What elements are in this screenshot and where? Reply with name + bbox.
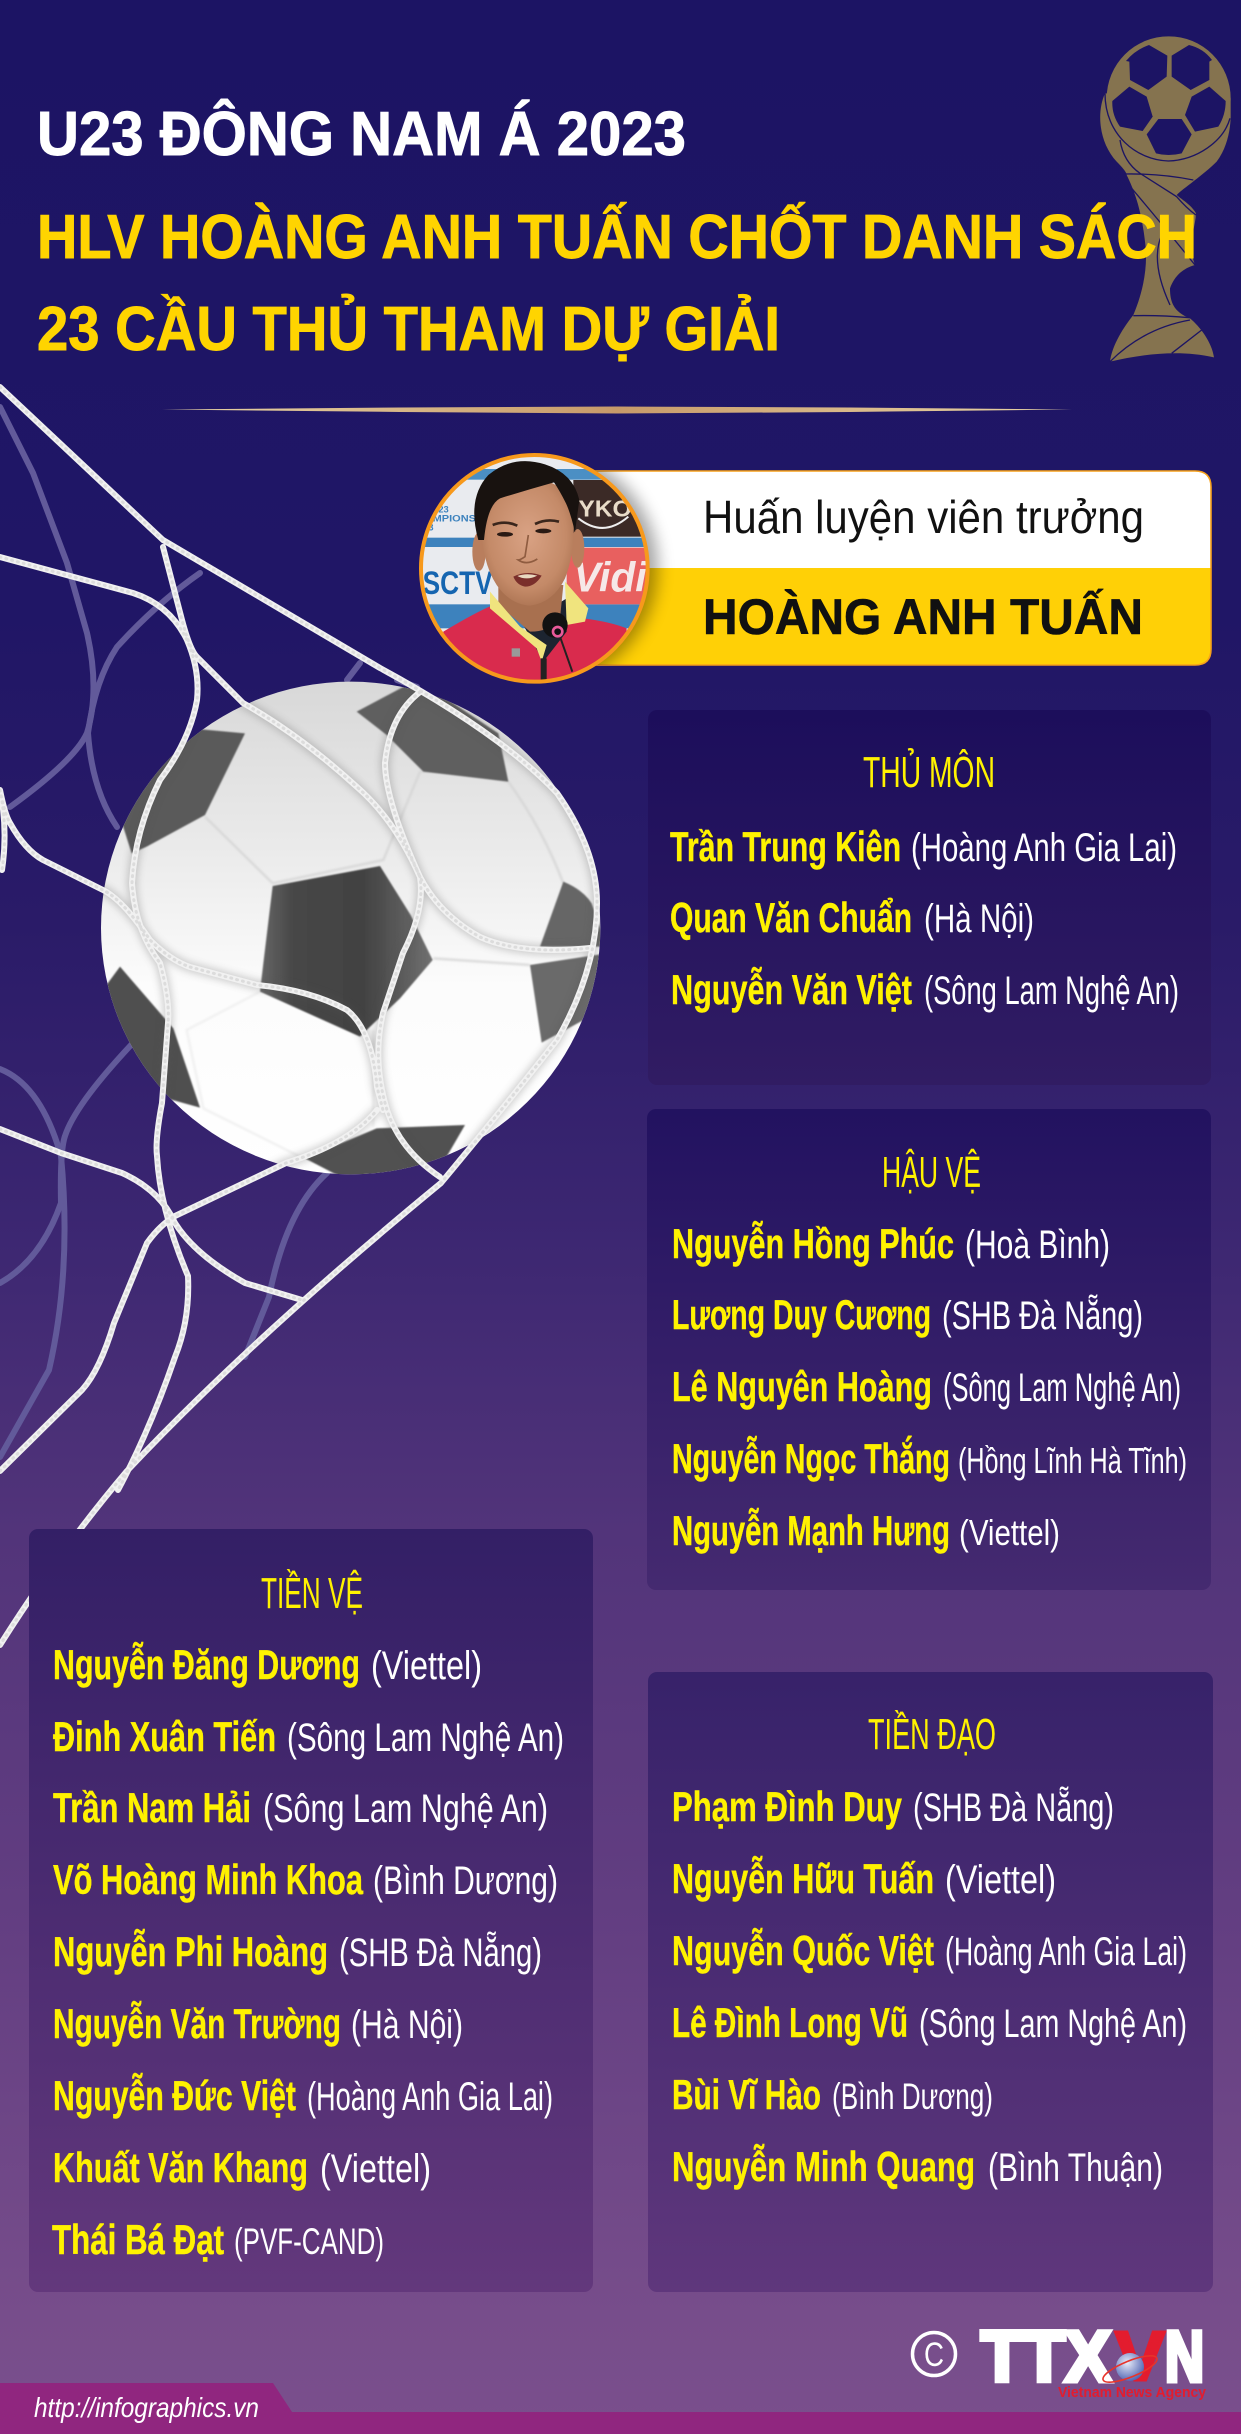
net: faint background strands xyxy=(0,407,417,1457)
player row: (Viettel) xyxy=(959,1512,1060,1553)
net: rope shadows on ball xyxy=(102,687,600,1168)
player row: Võ Hoàng Minh Khoa xyxy=(53,1856,363,1903)
footer band xyxy=(0,2383,1241,2434)
coach portrait: 3 xyxy=(428,522,434,532)
player row: (Viettel) xyxy=(945,1858,1056,1902)
player row: (Viettel) xyxy=(371,1644,482,1688)
coach card xyxy=(417,450,1211,688)
heading: midfielders: TIỀN VỆ xyxy=(261,1568,363,1618)
heading: defenders: HẬU VỆ xyxy=(882,1148,981,1197)
player row: Nguyễn Hồng Phúc xyxy=(672,1219,954,1267)
coach card: shadow and band xyxy=(594,470,1212,666)
copyright symbol: C xyxy=(924,2336,944,2374)
player row xyxy=(52,2216,384,2263)
player row xyxy=(53,1713,564,1760)
coach portrait: YKO xyxy=(578,496,632,522)
player row: (SHB Đà Nẵng) xyxy=(913,1785,1114,1830)
player row: Nguyễn Văn Trường xyxy=(53,1999,341,2047)
panel: midfielders xyxy=(29,1529,593,2292)
player row: Lê Đình Long Vũ xyxy=(672,1999,908,2046)
player row: (Bình Thuận) xyxy=(988,2146,1163,2190)
player row: Nguyễn Đăng Dương xyxy=(53,1640,360,1688)
player row: Nguyễn Mạnh Hưng xyxy=(672,1506,950,1554)
player row: Lê Nguyên Hoàng xyxy=(672,1363,932,1410)
player row: Phạm Đình Duy xyxy=(672,1783,902,1830)
coach name: HOÀNG ANH TUẤN xyxy=(703,589,1143,645)
logo letters: TTX xyxy=(981,2318,1111,2397)
website url: http://infographics.vn xyxy=(34,2392,259,2423)
player row: Nguyễn Ngọc Thắng xyxy=(672,1434,950,1482)
player row xyxy=(671,965,1179,1013)
player row: (Viettel) xyxy=(320,2147,431,2191)
player row: Nguyễn Văn Việt xyxy=(671,965,912,1013)
illustration: soccer ball xyxy=(97,682,607,1180)
player row: Bùi Vĩ Hào xyxy=(672,2071,821,2118)
heading: forwards: TIỀN ĐẠO xyxy=(868,1709,996,1759)
player row: (Hoàng Anh Gia Lai) xyxy=(307,2075,553,2119)
logo globe xyxy=(1100,2351,1160,2387)
player row xyxy=(53,2071,553,2119)
player row: (Sông Lam Nghệ An) xyxy=(263,1787,548,1831)
agency name: Vietnam News Agency xyxy=(1058,2384,1207,2401)
player row xyxy=(672,2071,993,2118)
player row: Trần Trung Kiên xyxy=(670,823,901,870)
logo: TTXVN xyxy=(912,2317,1207,2401)
icon: gold trophy xyxy=(1100,36,1231,362)
coach portrait: Vidi xyxy=(573,554,648,601)
player row: Khuất Văn Khang xyxy=(53,2144,308,2191)
player row: Nguyễn Đức Việt xyxy=(53,2071,296,2119)
coach role label: Huấn luyện viên trưởng xyxy=(703,491,1144,543)
player row: (SHB Đà Nẵng) xyxy=(942,1293,1143,1338)
player row: (Hà Nội) xyxy=(924,897,1034,941)
player row: Nguyễn Quốc Việt xyxy=(672,1926,934,1974)
player row: Nguyễn Phi Hoàng xyxy=(53,1927,328,1975)
title xyxy=(37,100,1197,364)
ball patches xyxy=(97,683,607,1180)
net: white rope strands xyxy=(0,387,597,1645)
player row: (PVF-CAND) xyxy=(234,2221,384,2262)
player row xyxy=(53,1784,548,1831)
coach portrait: 23 xyxy=(438,504,449,514)
player row: Nguyễn Minh Quang xyxy=(672,2142,975,2190)
panel: forwards xyxy=(648,1672,1213,2292)
coach portrait: MPIONS xyxy=(433,514,476,524)
player row: (Bình Dương) xyxy=(373,1859,558,1903)
player row xyxy=(670,823,1177,870)
logo letter V: V xyxy=(1115,2317,1165,2395)
player row xyxy=(672,1926,1187,1974)
coach portrait xyxy=(417,452,653,688)
player row: Trần Nam Hải xyxy=(53,1784,251,1831)
panel: defenders xyxy=(647,1109,1211,1590)
heading: goalkeepers: THỦ MÔN xyxy=(863,746,995,797)
ball seams xyxy=(187,771,563,1158)
player row: Lương Duy Cương xyxy=(672,1291,931,1338)
player row: (Sông Lam Nghệ An) xyxy=(287,1716,564,1760)
player row: Quan Văn Chuẩn xyxy=(670,894,912,941)
player row: Nguyễn Hữu Tuấn xyxy=(672,1854,934,1902)
player row: (SHB Đà Nẵng) xyxy=(339,1930,542,1975)
title line: headline 2: 23 CẦU THỦ THAM DỰ GIẢI xyxy=(37,295,780,364)
title line: event name: U23 ĐÔNG NAM Á 2023 xyxy=(37,100,686,169)
player row: (Hoà Bình) xyxy=(965,1223,1110,1267)
player row: Đinh Xuân Tiến xyxy=(53,1713,276,1760)
coach portrait: SCTV xyxy=(423,564,493,601)
player row: Thái Bá Đạt xyxy=(52,2216,224,2263)
logo letter N: N xyxy=(1165,2318,1204,2397)
panel: goalkeepers xyxy=(648,710,1211,1085)
player row xyxy=(672,1999,1187,2046)
player row: (Hà Nội) xyxy=(351,2003,463,2047)
player row: (Bình Dương) xyxy=(832,2076,993,2117)
copyright symbol xyxy=(912,2332,956,2376)
